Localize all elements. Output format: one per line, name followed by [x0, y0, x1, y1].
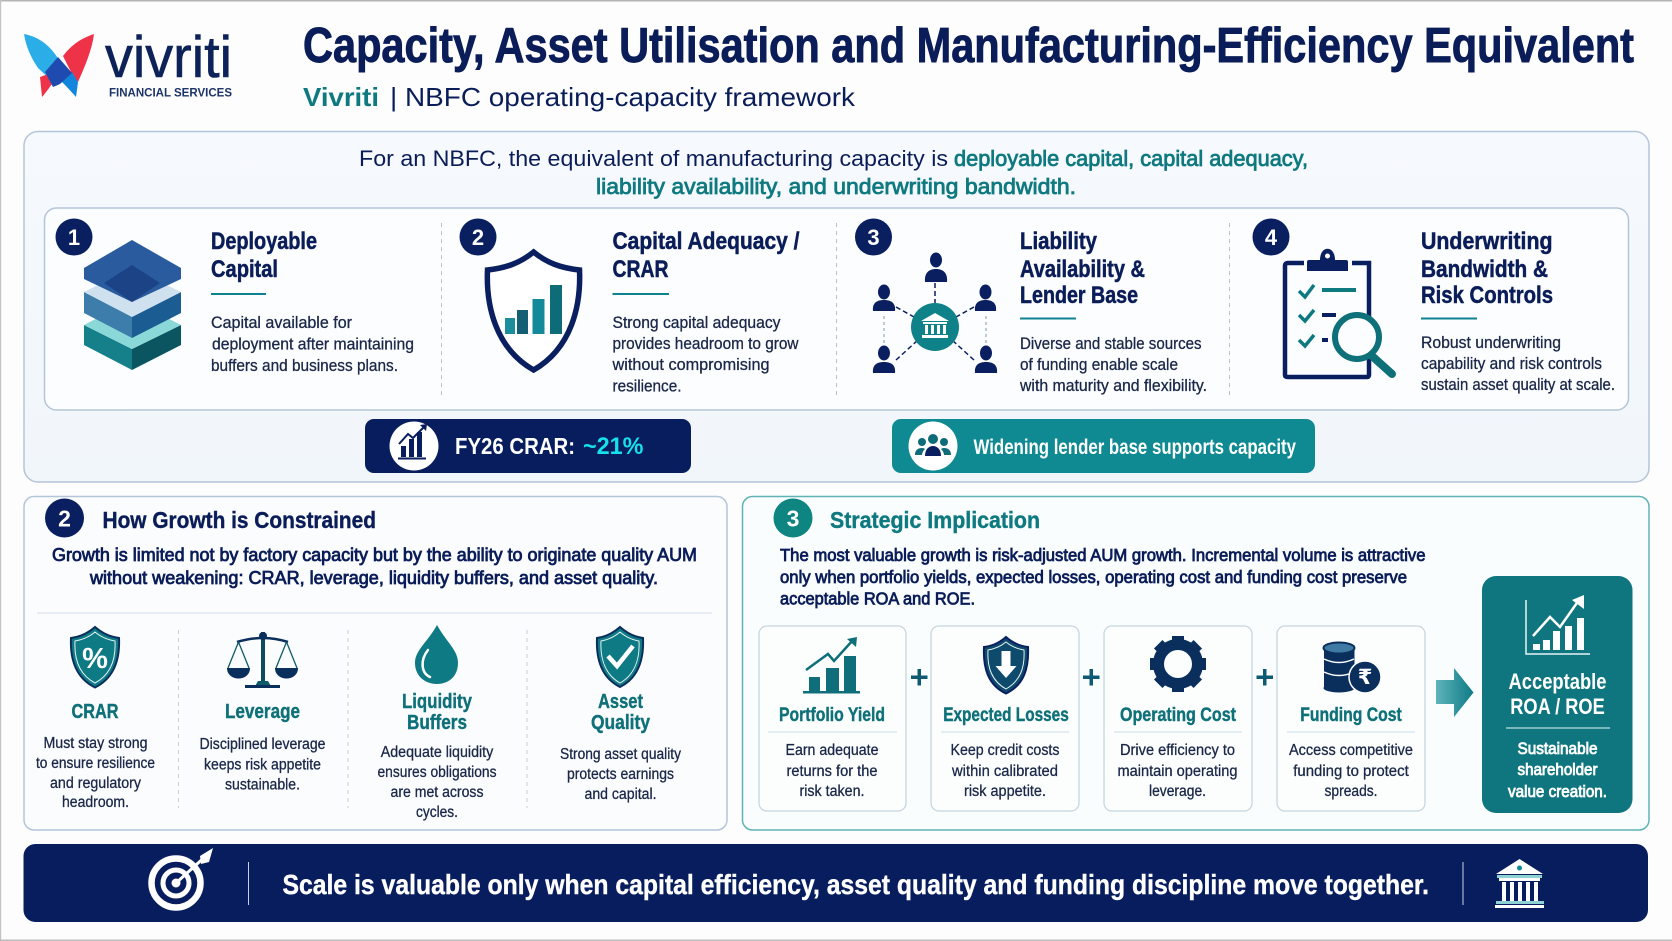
description: capability and risk controls [1421, 355, 1602, 373]
description: Access competitive [1289, 742, 1413, 759]
wordmark: vivriti [105, 25, 232, 90]
operator: plus [1083, 669, 1100, 686]
description [36, 735, 155, 811]
pillar 2: capital adequacy [460, 218, 800, 396]
icon: down arrow shield [984, 637, 1028, 694]
badge 2 [45, 498, 84, 538]
description: Earn adequate [786, 742, 878, 759]
intro statement: liability availability, and underwriting bandwidth. [596, 174, 1076, 199]
badge 3 [855, 218, 892, 256]
description: Disciplined leverage [200, 736, 326, 753]
description: cycles. [416, 804, 458, 821]
logo tagline: FINANCIAL SERVICES [109, 88, 232, 100]
description: Diverse and stable sources [1020, 335, 1202, 353]
card: expected losses [931, 626, 1079, 811]
badge 2: 2 [472, 225, 484, 250]
logo: Vivriti [24, 25, 232, 100]
constraint: liquidity buffers [378, 625, 497, 821]
icon: percent shield: % [82, 643, 108, 675]
outcome card: acceptable ROA / ROE [1482, 576, 1632, 813]
heading: Deployable [211, 228, 317, 255]
badge 4 [1252, 218, 1290, 256]
icon: rising bars [803, 637, 860, 694]
description: spreads. [1324, 783, 1378, 800]
subtitle: | NBFC operating-capacity framework [390, 82, 856, 112]
description [1019, 335, 1207, 395]
label: CRAR [72, 701, 119, 723]
description: keeps risk appetite [204, 756, 321, 774]
description: resilience. [612, 378, 682, 396]
description: protects earnings [567, 766, 674, 783]
icon: percent shield [71, 627, 119, 688]
badge 3 [774, 498, 812, 538]
description: provides headroom to grow [612, 335, 799, 353]
description: of funding enable scale [1020, 356, 1178, 374]
icon: target with arrow [152, 848, 213, 908]
callout: widening lender base: Widening lender base supports capacity [974, 436, 1296, 459]
intro text [780, 545, 1426, 608]
heading: Underwriting [1421, 228, 1552, 255]
description: Capital available for [211, 314, 352, 332]
label: Funding Cost [1300, 705, 1402, 726]
badge 3: 3 [787, 506, 799, 532]
label: Liquidity [402, 691, 473, 713]
description [612, 314, 799, 396]
pillar 1: deployable capital [56, 218, 414, 375]
description: Strong capital adequacy [612, 314, 781, 332]
icon: gear [1150, 636, 1206, 692]
heading [612, 228, 800, 283]
description: within calibrated [951, 763, 1058, 780]
heading [1421, 228, 1553, 309]
badge 1 [56, 218, 92, 256]
outcome description: Sustainable [1518, 740, 1598, 758]
description: headroom. [62, 794, 129, 811]
icon: butterfly mark [24, 34, 94, 97]
description: funding to protect [1293, 763, 1409, 780]
description: risk appetite. [964, 783, 1046, 800]
pillar 3: liability availability [855, 218, 1207, 395]
heading: Capital [211, 256, 278, 283]
badge 3: 3 [867, 225, 880, 250]
badge 2: 2 [58, 506, 71, 532]
heading: How Growth is Constrained [102, 507, 376, 533]
capacity pillars card [44, 208, 1628, 410]
constraint: leverage [200, 632, 326, 794]
intro statement: deployable capital, capital adequacy, [954, 146, 1308, 171]
description: and regulatory [50, 775, 141, 792]
outcome title: ROA / ROE [1510, 694, 1605, 719]
card: funding cost [1277, 626, 1425, 811]
icon: lender network [873, 252, 997, 373]
intro text: acceptable ROA and ROE. [780, 588, 975, 608]
description [1421, 334, 1615, 394]
outcome description [1508, 740, 1607, 801]
description: Strong asset quality [560, 746, 681, 763]
card: operating cost [1104, 626, 1252, 811]
badge 2 [460, 218, 496, 256]
description: Keep credit costs [950, 742, 1060, 759]
icon: clipboard and magnifier [1285, 249, 1392, 377]
heading: Risk Controls [1421, 282, 1553, 309]
description: deployment after maintaining [212, 336, 414, 354]
description: with maturity and flexibility. [1019, 377, 1207, 395]
outcome title: Acceptable [1508, 669, 1606, 694]
label: Operating Cost [1120, 705, 1237, 726]
description: Must stay strong [44, 735, 148, 752]
description: buffers and business plans. [211, 357, 398, 375]
conclusion text: Scale is valuable only when capital efficiency, asset quality and funding discipline move together. [282, 869, 1429, 900]
panel: how growth is constrained [24, 496, 727, 830]
icon: group of people [915, 434, 951, 456]
constraint: asset quality [560, 627, 681, 803]
description: Adequate liquidity [381, 744, 493, 761]
description [950, 742, 1060, 800]
description: Robust underwriting [1421, 334, 1561, 352]
description [1118, 742, 1238, 800]
label: Asset [598, 691, 643, 713]
icon: balance scale [227, 632, 298, 688]
icon: growth chart [398, 424, 427, 460]
description [200, 736, 326, 794]
operator: plus [911, 669, 928, 686]
heading: Strategic Implication [830, 507, 1040, 533]
label [402, 691, 473, 734]
description [378, 744, 497, 821]
description: Drive efficiency to [1120, 742, 1235, 759]
icon: institution [1495, 859, 1544, 908]
callout: widening lender base [892, 419, 1315, 473]
description: risk taken. [800, 783, 864, 800]
description [560, 746, 681, 803]
description: without compromising [612, 356, 770, 374]
card: portfolio yield [759, 626, 906, 811]
heading: Capital Adequacy / [612, 228, 800, 255]
banner: conclusion [24, 844, 1648, 922]
heading: CRAR [612, 256, 668, 283]
description: are met across [390, 784, 484, 801]
pillar 4: underwriting bandwidth [1252, 218, 1615, 394]
description [211, 314, 414, 375]
description: ensures obligations [378, 764, 497, 781]
label: Expected Losses [943, 705, 1069, 726]
icon: shield with bars [487, 252, 580, 370]
label: Portfolio Yield [779, 705, 885, 726]
icon: check shield [597, 627, 643, 687]
panel: strategic implication [742, 496, 1649, 830]
heading: Liability [1020, 228, 1098, 255]
subtitle: Vivriti [303, 82, 379, 112]
intro statement: For an NBFC, the equivalent of manufacturing capacity is [359, 146, 948, 171]
intro text: Growth is limited not by factory capacity but by the ability to originate quality AUM [52, 545, 697, 565]
heading [211, 228, 317, 283]
callout: FY26 CRAR: ~21% [583, 433, 644, 460]
callout: FY26 CRAR: FY26 CRAR: [455, 433, 575, 459]
outcome title [1508, 669, 1606, 719]
icon: coin stack with rupee [1324, 642, 1381, 693]
description: and capital. [584, 786, 656, 803]
icon: outcome chart [1526, 595, 1590, 654]
description: returns for the [786, 763, 878, 780]
icon: layered stack [84, 240, 181, 370]
outcome description: shareholder [1518, 761, 1598, 779]
icon: water drop [415, 625, 458, 684]
heading [1020, 228, 1145, 309]
heading: Availability & [1020, 256, 1145, 283]
operator: plus [1256, 669, 1273, 686]
intro text: only when portfolio yields, expected losses, operating cost and funding cost preserve [780, 567, 1407, 587]
outcome description: value creation. [1508, 783, 1607, 801]
description [1289, 742, 1413, 800]
icon: coin stack with rupee: ₹ [1358, 665, 1372, 689]
arrow to outcome [1436, 668, 1474, 717]
callout: FY26 CRAR [365, 419, 691, 473]
label: Buffers [407, 712, 467, 734]
badge 4: 4 [1265, 225, 1278, 250]
description: maintain operating [1118, 763, 1238, 780]
badge 1: 1 [68, 225, 80, 250]
constraint: CRAR [36, 627, 155, 811]
description: sustain asset quality at scale. [1421, 376, 1615, 394]
intro statement [359, 146, 1308, 199]
intro text: The most valuable growth is risk-adjusted AUM growth. Incremental volume is attractive [780, 545, 1426, 565]
heading: Lender Base [1020, 282, 1138, 309]
description [786, 742, 878, 800]
label [591, 691, 651, 734]
label: Quality [591, 712, 651, 734]
intro text [52, 545, 697, 588]
intro text: without weakening: CRAR, leverage, liquidity buffers, and asset quality. [89, 568, 658, 588]
heading: Bandwidth & [1421, 256, 1548, 283]
description: sustainable. [225, 776, 300, 794]
panel: operating capacity [24, 132, 1649, 482]
label: Leverage [225, 701, 300, 723]
description: leverage. [1149, 783, 1206, 800]
description: to ensure resilience [36, 755, 155, 772]
